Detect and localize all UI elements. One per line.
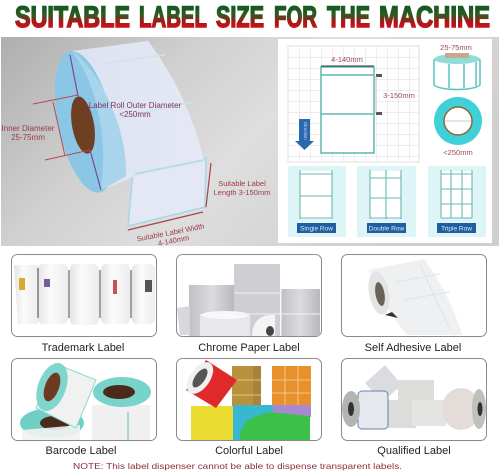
front view roll: <250mm bbox=[443, 148, 473, 157]
note: NOTE: This label dispenser cannot be able to dispense transparent labels. bbox=[73, 461, 402, 471]
title bbox=[15, 1, 490, 34]
label roll photo bbox=[44, 41, 206, 226]
caption: Colorful Label bbox=[215, 445, 283, 457]
double row layout bbox=[357, 166, 416, 237]
panel: self adhesive label bbox=[342, 254, 486, 354]
caption: Trademark Label bbox=[42, 342, 124, 354]
triple row layout bbox=[428, 166, 486, 237]
roll annotations bbox=[2, 101, 270, 248]
icon: direction arrow: Direction bbox=[303, 122, 308, 140]
title: SIZE bbox=[216, 1, 264, 34]
panel: chrome paper label bbox=[176, 254, 322, 354]
grid diagram: 3-150mm bbox=[383, 91, 415, 100]
roll annotations: 25-75mm bbox=[11, 133, 45, 142]
front view roll bbox=[434, 97, 482, 157]
grid diagram bbox=[288, 46, 419, 162]
panel: trademark label bbox=[12, 254, 156, 354]
icon: direction arrow bbox=[295, 119, 314, 150]
side view roll bbox=[434, 43, 480, 90]
purple diameter line bbox=[70, 55, 101, 190]
double row layout: Double Row bbox=[369, 226, 405, 232]
title: THE bbox=[327, 1, 370, 34]
panel: barcode label bbox=[12, 358, 156, 457]
roll annotations: Suitable Label Width bbox=[136, 222, 205, 244]
single row layout bbox=[288, 166, 346, 237]
grid diagram: 4-140mm bbox=[331, 55, 363, 64]
side view roll: 25-75mm bbox=[440, 43, 472, 52]
caption: Qualified Label bbox=[377, 445, 451, 457]
inner diameter lines bbox=[33, 95, 90, 160]
title: SUITABLE bbox=[15, 1, 130, 34]
caption: Barcode Label bbox=[46, 445, 116, 457]
roll annotations: Suitable Label bbox=[218, 179, 266, 188]
roll annotations: Label Roll Outer Diameter bbox=[89, 101, 182, 110]
roll annotations: Length 3-150mm bbox=[214, 188, 270, 197]
roll annotations: 4-140mm bbox=[157, 233, 190, 248]
roll annotations: <250mm bbox=[119, 110, 151, 119]
caption: Self Adhesive Label bbox=[365, 342, 461, 354]
length and width lines bbox=[128, 163, 211, 230]
triple row layout: Triple Row bbox=[441, 226, 472, 232]
title: LABEL bbox=[139, 1, 207, 34]
single row layout: Single Row bbox=[300, 226, 333, 232]
panel: roll dimensions bbox=[1, 37, 499, 248]
roll annotations: Inner Diameter bbox=[2, 124, 55, 133]
panel: colorful label bbox=[176, 358, 322, 457]
panel: specification diagrams bbox=[278, 39, 492, 243]
caption: Chrome Paper Label bbox=[198, 342, 300, 354]
panel: qualified label bbox=[342, 358, 486, 457]
title: FOR bbox=[274, 1, 317, 34]
